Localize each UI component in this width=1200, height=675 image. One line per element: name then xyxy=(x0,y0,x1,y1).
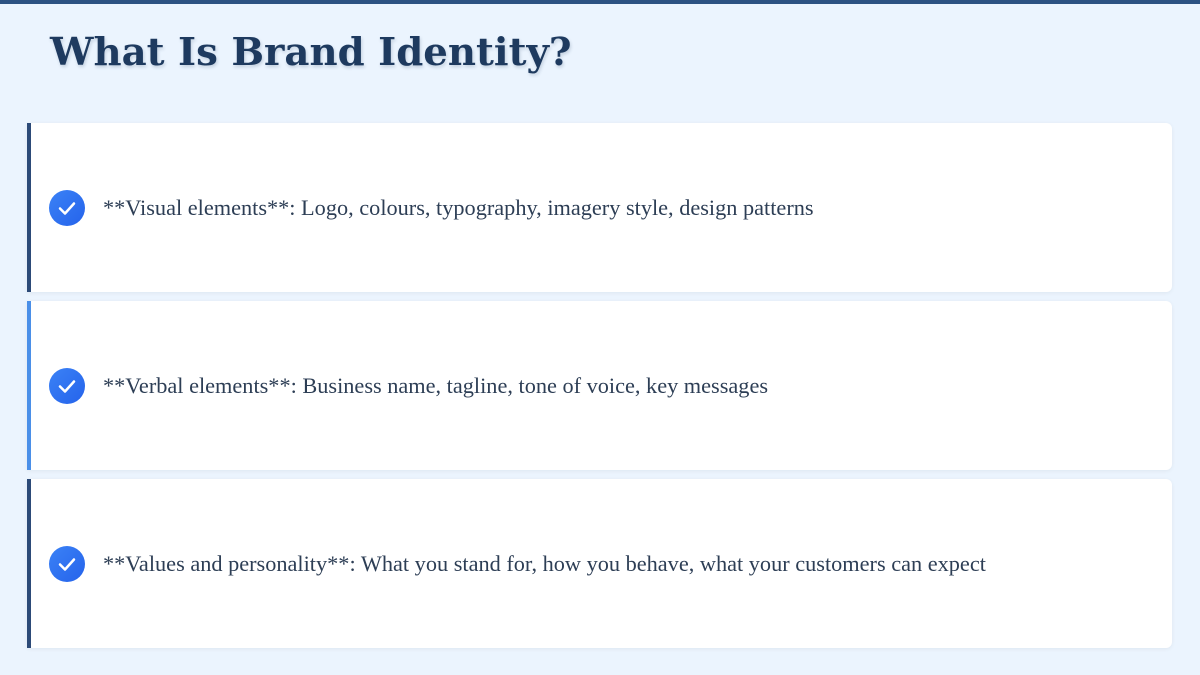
card: values xyxy=(27,479,1172,648)
icon: check xyxy=(49,368,85,404)
icon: check xyxy=(49,546,85,582)
card: verbal elements xyxy=(27,301,1172,470)
text: **Visual elements**: Logo, colours, typography, imagery style, design patterns xyxy=(103,195,814,220)
icon: check xyxy=(49,190,85,226)
title: What Is Brand Identity? xyxy=(50,30,572,75)
text: **Verbal elements**: Business name, tagline, tone of voice, key messages xyxy=(103,373,768,398)
text: **Values and personality**: What you stand for, how you behave, what your customers can expect xyxy=(103,551,986,576)
card: visual elements xyxy=(27,123,1172,292)
